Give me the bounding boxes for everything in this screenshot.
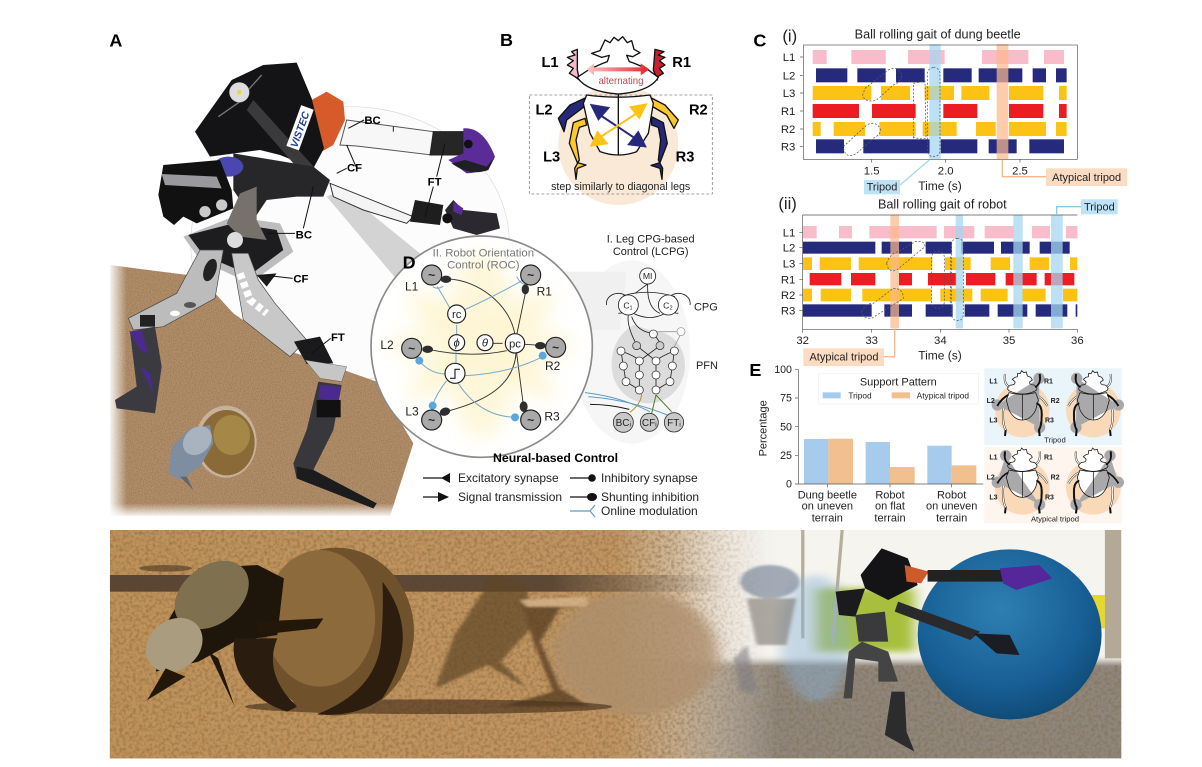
shunting inhibition key: Shunting inhibition: [601, 490, 699, 504]
bottom photo: dung beetle blending into robot rolling a ball: [87, 530, 1151, 767]
joint labels with leaders: CF: [293, 274, 309, 286]
beetle leg labels: R3: [1045, 418, 1054, 425]
tilde glyphs: [408, 268, 559, 427]
robot FT actuator and ankle: [294, 337, 347, 382]
ROC circle: [371, 236, 592, 457]
robot hip block: [183, 187, 293, 283]
PFN grey region: [612, 325, 685, 403]
leg labels: L1: [405, 280, 419, 294]
x tick labels: 36: [1071, 335, 1084, 347]
leg labels: [380, 280, 561, 424]
CPG neuron labels: [623, 271, 673, 310]
sand grain texture: [110, 530, 756, 758]
dung beetle: [139, 557, 323, 712]
leg labels: L2: [535, 102, 553, 118]
y tick labels: 100: [774, 364, 792, 376]
tripod beetle panel background: [984, 368, 1122, 445]
tilde glyphs: ~: [527, 413, 534, 427]
shunting synapses: [422, 276, 546, 417]
x category labels: terrain: [874, 512, 906, 524]
panel D: neural-based control: [371, 236, 690, 457]
right scene background: [87, 530, 1151, 767]
beetle leg labels: L2: [987, 475, 995, 482]
x category labels: Dung beetle: [798, 489, 857, 501]
atypical tripod callout: [803, 328, 895, 366]
blue haze around ghost robot: [780, 575, 852, 702]
row labels: [781, 227, 795, 318]
ROC title: Control (ROC): [447, 260, 520, 272]
leg labels: R3: [676, 149, 694, 165]
interneuron labels: θ: [482, 337, 489, 349]
excitatory synapse key: Excitatory synapse: [458, 471, 559, 485]
LCPG title: I. Leg CPG-based: [607, 233, 695, 245]
x category labels: Robot: [875, 489, 905, 501]
leg labels: [535, 55, 708, 165]
x tick labels: [864, 166, 1028, 178]
PFN label: PFN: [696, 360, 718, 372]
sand scene: [110, 530, 768, 758]
beetle leg labels: R2: [1051, 398, 1060, 405]
row labels: R2: [781, 124, 795, 136]
axes and frame: [800, 45, 1077, 163]
joint labels with leaders: [263, 115, 445, 353]
robot left femur: [128, 250, 223, 330]
dung beetle with ball inset: [168, 406, 257, 490]
panel C (ii): gait chart of robot: [778, 194, 1118, 366]
connector wedge from robot to controller: [327, 190, 420, 283]
beetle leg labels: R2: [1051, 475, 1060, 482]
axes: [799, 215, 1077, 333]
leg labels: L2: [380, 338, 394, 352]
robot right lower leg: [293, 382, 377, 508]
row labels: L1: [783, 52, 795, 64]
CPG label: CPG: [694, 301, 718, 313]
panel letter B: B: [500, 30, 513, 50]
row labels: L2: [783, 243, 795, 255]
y tick labels: [774, 364, 792, 491]
leg labels: R1: [537, 285, 552, 299]
CPG neuron labels: C₁: [623, 300, 633, 310]
y axis title: Percentage: [758, 400, 770, 456]
atypical tripod highlight: [890, 215, 899, 328]
tripod callout: [1057, 199, 1118, 215]
legend: Tripod: [848, 391, 872, 401]
legend: Atypical tripod: [917, 391, 969, 401]
x category labels: on uneven: [926, 501, 977, 513]
beetle: tripod stance 2: [1066, 371, 1124, 437]
chart title: Ball rolling gait of robot: [878, 198, 1007, 212]
blue modulation connections: [420, 277, 543, 417]
online modulation key: Online modulation: [601, 504, 698, 518]
joint labels: FTᵢ: [667, 418, 681, 429]
gait bars: [813, 50, 1067, 153]
x tick labels: [796, 335, 1084, 347]
x category labels: on uneven: [802, 501, 853, 513]
tripod highlight: [929, 44, 941, 159]
x tick labels: 32: [796, 335, 809, 347]
wedge between ROC and LCPG: [542, 272, 627, 330]
joint labels with leaders: FT: [428, 176, 442, 188]
interneurons: [445, 305, 525, 383]
panel letter C: C: [753, 31, 766, 51]
atypical tripod caption: Atypical tripod: [1031, 514, 1079, 523]
axes: [795, 369, 983, 487]
x axis title: Time (s): [918, 348, 962, 362]
joint motor neurons: [613, 412, 684, 432]
robot upper arm: [340, 120, 495, 173]
x category labels: terrain: [812, 512, 843, 524]
y tick labels: 50: [780, 421, 792, 433]
x category labels: terrain: [936, 512, 967, 524]
joint labels with leaders: CF: [347, 162, 362, 174]
beetle leg labels: L2: [987, 398, 995, 405]
inhibitory synapse key: Inhibitory synapse: [601, 471, 698, 485]
beetle leg labels: R3: [1045, 494, 1054, 501]
x axis title: Time (s): [918, 179, 962, 193]
interneuron labels: ϕ: [454, 337, 460, 349]
robot orange actuator: [312, 92, 345, 152]
row labels: R2: [781, 290, 795, 302]
alternating arrow: alternating: [598, 76, 644, 87]
tripod callout: Tripod: [1084, 202, 1115, 214]
row labels: R3: [781, 141, 795, 153]
tilde glyphs: ~: [428, 413, 435, 427]
interneuron labels: [450, 309, 521, 378]
beetle: atypical tripod stance 1: [992, 448, 1050, 515]
tilde glyphs: ~: [428, 268, 435, 282]
x tick labels: 33: [865, 335, 878, 347]
beetle leg labels: L3: [989, 494, 998, 501]
leg labels: R2: [545, 359, 561, 373]
x category labels: Robot: [937, 489, 966, 501]
beetle outline with coloured legs: [558, 37, 678, 179]
leg labels: L3: [405, 405, 419, 419]
beetle leg labels: L1: [989, 455, 998, 462]
CPG neuron labels: C₂: [663, 300, 673, 310]
pale orange circle: [558, 85, 678, 205]
row labels: [781, 52, 795, 153]
row labels: R1: [781, 106, 795, 118]
ghost beetle: [435, 575, 589, 707]
x category labels: [798, 489, 977, 524]
caption: step similarly to diagonal legs: [551, 181, 690, 193]
dashed step groupings: [843, 68, 940, 157]
blue online modulation synapses: [415, 352, 547, 421]
x tick labels: 2.0: [938, 166, 954, 178]
interneuron labels: pc: [509, 338, 521, 350]
PFN neurons: [617, 328, 685, 394]
network wiring: [607, 284, 690, 390]
beetle leg labels: L3: [989, 418, 998, 425]
atypical tripod callout: Atypical tripod: [809, 352, 878, 364]
diagonal gold arrow: [590, 103, 647, 147]
robot lower arm: [330, 183, 500, 235]
joint labels with leaders: BC: [296, 229, 312, 241]
beetle leg labels: [987, 378, 1060, 501]
outgoing connections: [585, 393, 672, 415]
joint labels: BCᵢ: [616, 418, 631, 429]
tilde glyphs: ~: [527, 268, 534, 282]
legend: Support Pattern: [860, 376, 937, 388]
robot head with camera: [158, 160, 233, 225]
dung ball: [259, 548, 414, 716]
row labels: L3: [783, 259, 795, 271]
beetle leg labels: L1: [989, 378, 998, 385]
legend: [818, 373, 978, 404]
panel E: support pattern bar chart: [749, 360, 1124, 524]
legend: neural-based control: [423, 451, 699, 518]
tripod highlights: [956, 215, 1063, 328]
x category labels: on flat: [875, 501, 905, 513]
leg labels: R1: [672, 55, 691, 71]
robot torso: [195, 63, 324, 177]
motor neurons: [402, 265, 566, 430]
LCPG pale background: [573, 260, 690, 444]
robot joints and body frame: [233, 153, 330, 220]
white ball: [191, 107, 509, 380]
dashed frame: [529, 95, 712, 194]
panel letter A: A: [109, 31, 122, 51]
panel D: LCPG network: [585, 233, 718, 432]
interneuron labels: rc: [452, 309, 462, 321]
y tick labels: 25: [780, 450, 792, 462]
leg labels: R2: [689, 102, 708, 118]
ghost robot: [734, 565, 799, 692]
joint labels with leaders: BC: [364, 115, 381, 127]
panel B: beetle leg coordination: [500, 30, 712, 205]
beetle leg labels: R1: [1044, 455, 1053, 462]
VISTEC logo: VISTEC: [289, 110, 313, 149]
panel letter D: D: [403, 252, 416, 272]
joint labels with leaders: FT: [331, 332, 345, 344]
y tick labels: 0: [786, 479, 792, 491]
ground with straw texture: [108, 263, 413, 518]
atypical tripod beetle panel background: [984, 447, 1122, 523]
ROC title: II. Robot Orientation: [433, 248, 534, 260]
tripod callout: Tripod: [867, 182, 897, 194]
row labels: R1: [781, 274, 795, 286]
yellow glow: [388, 252, 575, 438]
joint labels: [616, 418, 681, 429]
leg labels: R3: [544, 410, 560, 424]
x tick labels: 2.5: [1012, 166, 1028, 178]
tilde glyphs: ~: [408, 341, 415, 355]
LCPG title: Control (LCPG): [613, 246, 689, 258]
robot left lower leg: [115, 327, 162, 413]
signal transmission key: Signal transmission: [458, 490, 562, 504]
robot on blue ball: [836, 548, 1052, 752]
ghost ball: [553, 592, 717, 715]
alternating arrow: [587, 63, 649, 87]
CPG neuron labels: MI: [643, 271, 652, 281]
panel A: robot rolling a ball on ground: [108, 31, 509, 518]
blue ball: [918, 549, 1102, 719]
diagonal navy arrow: [590, 104, 647, 147]
x tick labels: 35: [1003, 335, 1015, 347]
row labels: L1: [783, 227, 795, 239]
row labels: L2: [783, 70, 795, 82]
legend heading: Neural-based Control: [493, 451, 618, 465]
tripod caption: Tripod: [1044, 436, 1066, 445]
beetle: atypical tripod stance 2: [1066, 448, 1124, 515]
joint labels: CFᵢ: [642, 418, 657, 429]
chart title: Ball rolling gait of dung beetle: [855, 28, 1021, 42]
CPG neurons: [618, 268, 678, 315]
atypical tripod highlight: [997, 44, 1008, 159]
atypical tripod callout: [1002, 159, 1127, 186]
subpanel label i: (i): [782, 26, 797, 45]
leg labels: L1: [541, 55, 559, 71]
panel letter E: E: [749, 360, 761, 380]
row labels: L3: [783, 88, 795, 100]
tripod callout: [864, 160, 929, 194]
row labels: R3: [781, 306, 795, 318]
x tick labels: 34: [934, 335, 947, 347]
atypical tripod callout: Atypical tripod: [1052, 172, 1121, 184]
beetle leg labels: R1: [1044, 378, 1053, 385]
cast shadows: [110, 565, 724, 714]
robot blue and white cable joint: [213, 157, 243, 177]
dashed step groupings: [862, 238, 963, 321]
y tick labels: 75: [780, 393, 792, 405]
tilde glyphs: ~: [552, 340, 559, 354]
leg labels: L3: [543, 149, 560, 165]
black connections from pc: [428, 279, 546, 411]
gait bars: [803, 226, 1077, 317]
robot right femur: [232, 253, 307, 357]
x tick labels: 1.5: [864, 166, 880, 178]
panel C (i): gait chart of dung beetle: [753, 26, 1127, 194]
bars: [804, 439, 976, 484]
beetle: tripod stance 1: [992, 371, 1050, 437]
subpanel label ii: (ii): [778, 194, 797, 213]
